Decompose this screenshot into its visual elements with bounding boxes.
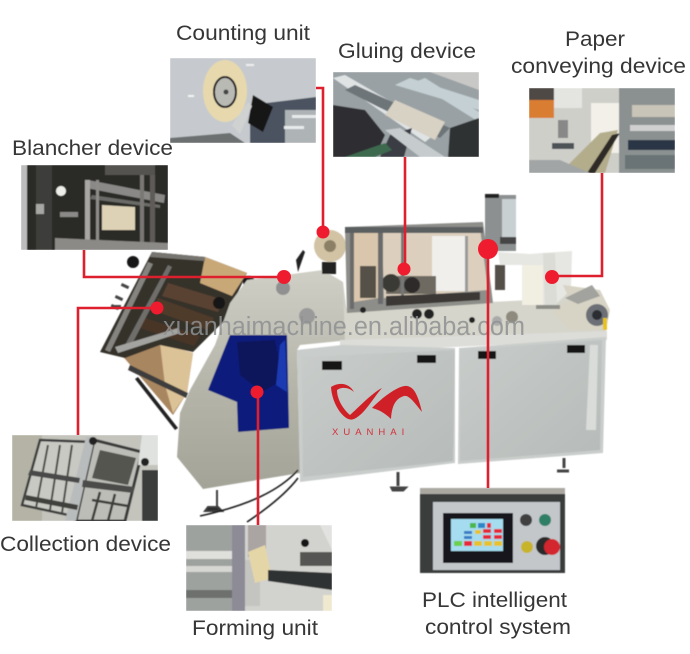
connector: forming unit [250, 386, 264, 525]
glass window [345, 222, 493, 313]
machine: paper box forming machine [100, 194, 610, 522]
label: collection device: Collection device [0, 532, 171, 556]
photo: counting unit [170, 58, 316, 143]
left cabinet [297, 345, 455, 482]
connector: blancher device [84, 250, 291, 284]
photo: collection device [12, 435, 158, 521]
collection frame [100, 252, 255, 430]
label: paper conveying device: conveying device [511, 54, 686, 78]
photo: blancher device [21, 165, 168, 250]
label: gluing device: Gluing device [338, 39, 476, 63]
control box [485, 195, 516, 251]
connector: paper conveying device [545, 173, 602, 284]
feet and cables [205, 490, 222, 511]
label: PLC intelligent control system: PLC intelligent [422, 588, 567, 612]
counting roll [314, 230, 346, 262]
blue cover [208, 335, 289, 432]
upper body [343, 275, 607, 345]
photo: PLC control panel [420, 488, 565, 573]
label: paper conveying device: Paper [565, 27, 625, 51]
logo: XUANHAI: XUANHAI [332, 427, 409, 438]
main side panel [177, 270, 350, 489]
label: forming unit: Forming unit [192, 616, 318, 640]
photo: paper conveying device [529, 88, 675, 173]
label: blancher device: Blancher device [12, 136, 173, 160]
label: PLC intelligent control system [422, 588, 571, 639]
watermark: xuanhaimachine.en.alibaba.com [163, 313, 525, 341]
label: paper conveying device [511, 27, 686, 78]
label: counting unit: Counting unit [176, 21, 310, 45]
logo: XUANHAI [331, 384, 422, 438]
touch screen [451, 519, 503, 551]
connector: counting unit [316, 88, 330, 238]
connector: collection device [78, 302, 164, 435]
label: PLC intelligent control system: control system [425, 615, 571, 639]
connector: gluing device [398, 157, 410, 276]
connector: PLC control system [478, 239, 498, 488]
right cabinet [458, 337, 606, 464]
photo: forming unit [186, 525, 332, 611]
right conveying parts [495, 251, 610, 330]
photo: gluing device [333, 72, 479, 157]
